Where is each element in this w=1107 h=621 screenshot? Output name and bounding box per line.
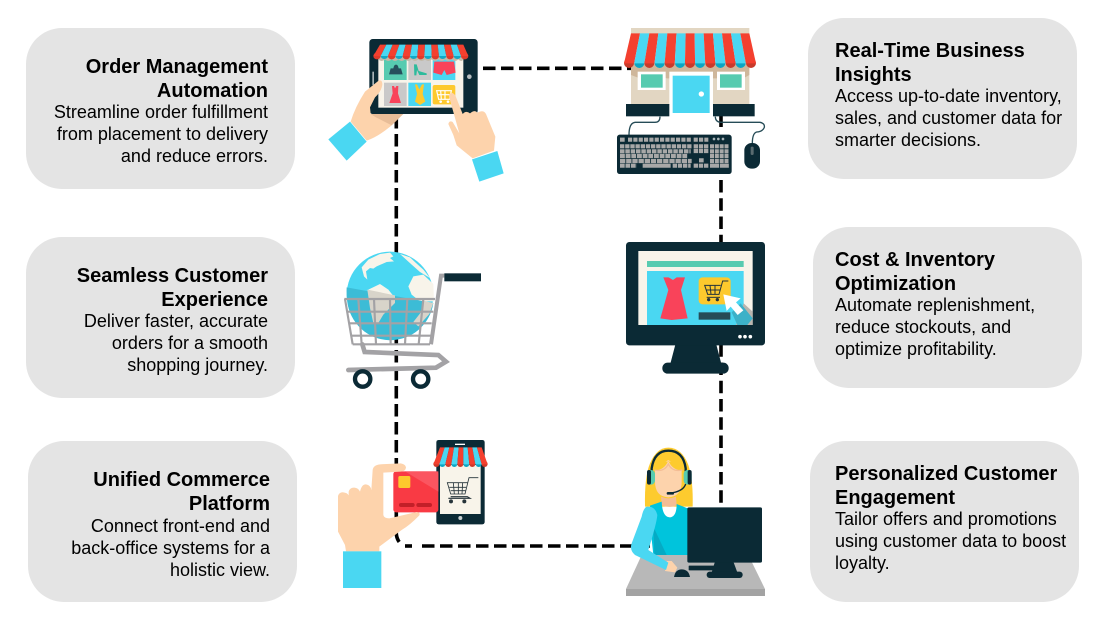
heading: seamless customer experience: Experience bbox=[161, 289, 268, 311]
text: seamless experience description: Deliver faster, accurate bbox=[84, 311, 268, 331]
text: unified platform description: holistic view. bbox=[170, 560, 270, 580]
text: business insights description: Access up-to-date inventory, bbox=[835, 86, 1062, 106]
dashed connector path bbox=[396, 68, 721, 546]
text: seamless experience description: shopping journey. bbox=[127, 355, 268, 375]
text: business insights description: sales, and customer data for bbox=[835, 108, 1062, 128]
panel: cost and inventory optimization bbox=[813, 227, 1082, 388]
heading: order management automation: Order Management bbox=[86, 56, 268, 78]
icon: storefront with keyboard and mouse bbox=[617, 28, 764, 174]
icon: customer support agent at desk bbox=[626, 448, 765, 596]
heading: personalized customer engagement: Engagement bbox=[835, 487, 955, 509]
text: seamless experience description: orders for a smooth bbox=[112, 333, 268, 353]
panel: personalized customer engagement bbox=[810, 441, 1079, 602]
heading: order management automation: Automation bbox=[157, 80, 268, 102]
text: customer engagement description: using customer data to boost bbox=[835, 531, 1066, 551]
heading: cost and inventory optimization: Optimization bbox=[835, 273, 956, 295]
text: business insights description: smarter decisions. bbox=[835, 130, 981, 150]
heading: unified commerce platform: Platform bbox=[189, 493, 270, 515]
heading: real-time business insights: Real-Time Business bbox=[835, 40, 1025, 62]
text: cost optimization description: optimize profitability. bbox=[835, 339, 997, 359]
text: order management description: from placement to delivery bbox=[57, 124, 268, 144]
heading: unified commerce platform: Unified Commerce bbox=[93, 469, 270, 491]
text: order management description: Streamline order fulfillment bbox=[54, 102, 268, 122]
heading: personalized customer engagement: Personalized Customer bbox=[835, 463, 1057, 485]
icon: hands holding shop tablet bbox=[328, 39, 504, 182]
text: customer engagement description: loyalty. bbox=[835, 553, 890, 573]
icon: hand holding credit card and phone shop bbox=[338, 440, 488, 588]
panel: seamless customer experience bbox=[26, 237, 295, 398]
panel: unified commerce platform bbox=[28, 441, 297, 602]
text: cost optimization description: reduce stockouts, and bbox=[835, 317, 1011, 337]
text: unified platform description: Connect front-end and bbox=[91, 516, 270, 536]
text: cost optimization description: Automate replenishment, bbox=[835, 295, 1035, 315]
heading: seamless customer experience: Seamless Customer bbox=[77, 265, 268, 287]
icon: desktop monitor with shop page bbox=[626, 242, 765, 374]
panel: real-time business insights bbox=[808, 18, 1077, 179]
heading: cost and inventory optimization: Cost & Inventory bbox=[835, 249, 995, 271]
text: unified platform description: back-office systems for a bbox=[71, 538, 271, 558]
icon: globe in shopping cart bbox=[344, 252, 481, 387]
heading: real-time business insights: Insights bbox=[835, 64, 912, 86]
panel: order management automation bbox=[26, 28, 295, 189]
text: order management description: and reduce errors. bbox=[121, 146, 268, 166]
text: customer engagement description: Tailor offers and promotions bbox=[835, 509, 1057, 529]
